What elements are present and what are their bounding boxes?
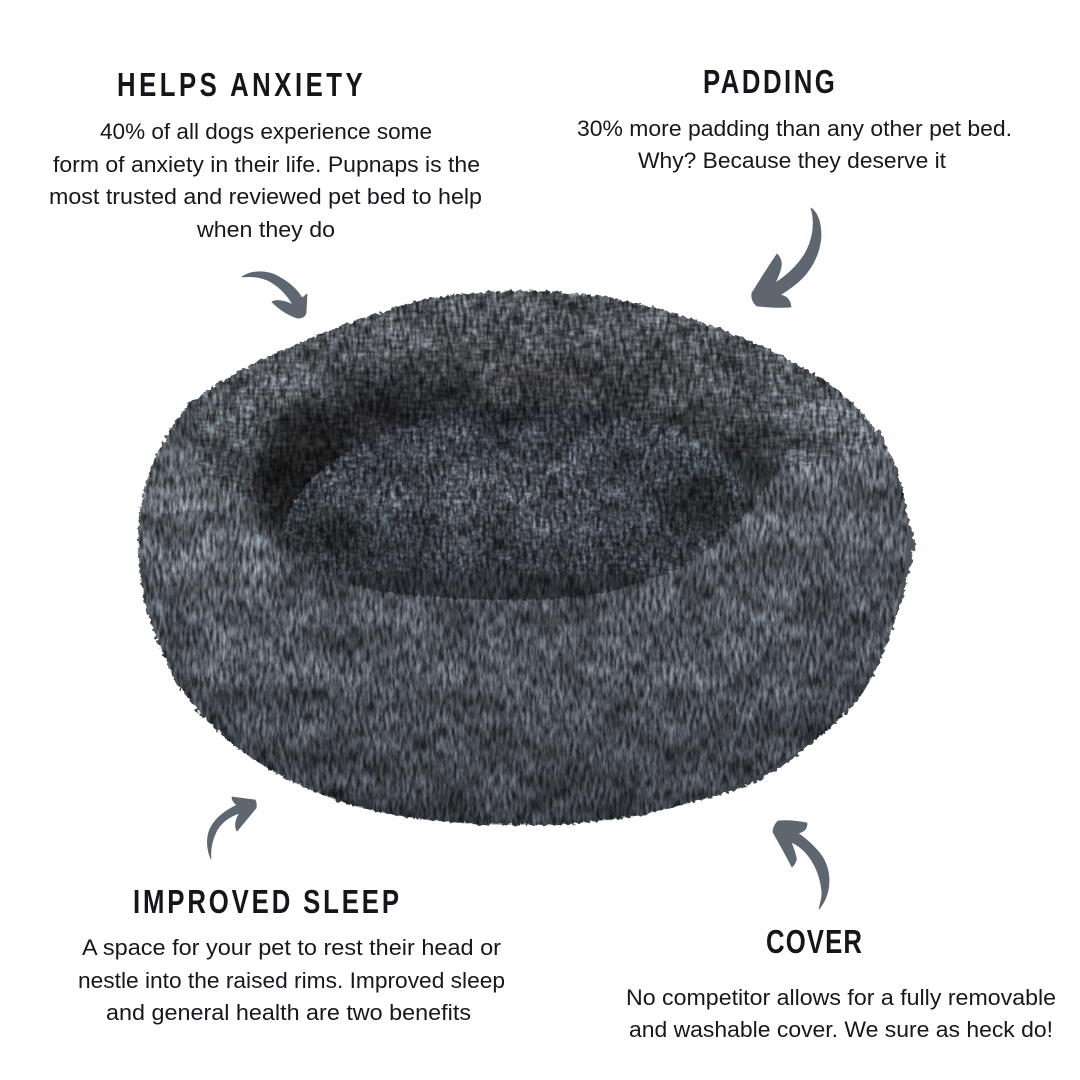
text block: helps anxiety description: when they do — [196, 217, 335, 242]
arrow: helps anxiety to bed — [242, 272, 307, 318]
text block: improved sleep description: A space for your pet to rest their head or — [82, 935, 501, 960]
bed outer body — [138, 291, 907, 825]
heading: cover: COVER — [766, 924, 862, 961]
text block: improved sleep description: nestle into the raised rims. Improved sleep — [78, 968, 505, 993]
fur texture on outer wall — [130, 280, 920, 840]
fur texture on upper rim — [180, 285, 890, 525]
bed photo illustration — [130, 280, 920, 850]
text block: cover description: No competitor allows for a fully removable — [626, 985, 1056, 1010]
text block: cover description — [626, 985, 1056, 1042]
fur mottling — [130, 280, 920, 840]
text block: helps anxiety description — [49, 119, 482, 242]
text block: padding description — [577, 116, 1012, 173]
text block: improved sleep description — [78, 935, 505, 1025]
text block: helps anxiety description: most trusted and reviewed pet bed to help — [49, 184, 482, 209]
text block: helps anxiety description: form of anxiety in their life. Pupnaps is the — [53, 152, 480, 177]
heading: helps anxiety: HELPS ANXIETY — [117, 67, 363, 104]
heading: padding: PADDING — [703, 64, 835, 101]
text block: cover description: and washable cover. We sure as heck do! — [629, 1017, 1053, 1042]
bed inner wall — [142, 335, 883, 600]
cushion shading — [285, 405, 742, 557]
text block: padding description: Why? Because they deserve it — [638, 148, 946, 173]
front rim shading — [150, 535, 895, 850]
bed front rim — [147, 430, 915, 819]
fur texture on cushion — [280, 400, 750, 575]
arrow: improved sleep to bed — [207, 797, 256, 859]
text block: helps anxiety description: 40% of all dogs experience some — [100, 119, 432, 144]
text block: padding description: 30% more padding than any other pet bed. — [577, 116, 1012, 141]
arrow: cover to bed — [773, 821, 829, 909]
heading: improved sleep: IMPROVED SLEEP — [133, 884, 399, 921]
bed centre cushion — [283, 407, 745, 610]
text block: improved sleep description: and general health are two benefits — [106, 1000, 471, 1025]
arrow: padding to bed — [752, 208, 821, 307]
